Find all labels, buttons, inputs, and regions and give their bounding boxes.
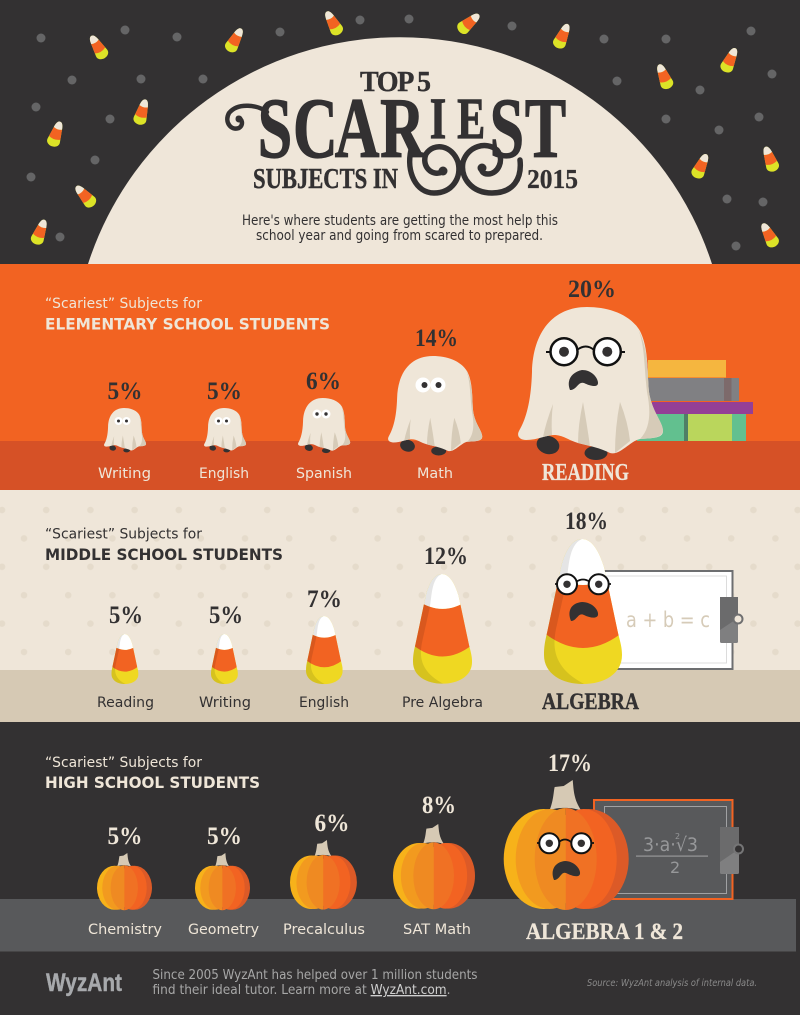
item: english: 7% xyxy=(307,586,342,613)
item: sat math: SAT Math xyxy=(403,922,471,938)
item: writing: Writing xyxy=(98,466,151,482)
item: algebra: 18% xyxy=(565,508,608,535)
heading: elementary xyxy=(45,296,330,334)
item: algebra xyxy=(542,508,639,714)
scattered candy corn icons xyxy=(29,8,781,250)
item: sat math xyxy=(393,792,475,938)
item: reading xyxy=(97,602,154,711)
item: algebra: ALGEBRA xyxy=(542,689,639,714)
glasses xyxy=(546,338,625,365)
item: writing: 5% xyxy=(209,602,243,629)
heading: middle xyxy=(45,527,283,564)
floor xyxy=(0,670,800,722)
item: geometry: 5% xyxy=(207,823,242,850)
icon: books xyxy=(637,360,753,441)
logo: wyzant: WyzAnt xyxy=(46,969,123,997)
intro text: Here's where students are getting the most help this xyxy=(242,213,558,229)
heading: high xyxy=(45,755,260,792)
title line: subjects in: SUBJECTS IN xyxy=(253,164,398,195)
heading: elementary: “Scariest” Subjects for xyxy=(45,296,202,312)
item: precalculus: Precalculus xyxy=(283,922,365,938)
item: algebra 1 and 2 xyxy=(504,750,683,944)
icon: chalkboard: 3·a·√3 xyxy=(643,834,698,856)
glasses xyxy=(555,574,611,594)
item: chemistry xyxy=(88,823,162,938)
item: writing: 5% xyxy=(108,378,142,405)
item: geometry: Geometry xyxy=(188,922,259,938)
item: reading: READING xyxy=(542,460,629,486)
item: math: 14% xyxy=(415,325,458,352)
icon: chalkboard: 2 xyxy=(675,832,680,841)
item: english: 5% xyxy=(207,378,242,405)
item: english xyxy=(299,586,349,711)
floor xyxy=(0,441,800,490)
title line: scariest: SCAR xyxy=(258,81,426,177)
footer text: find their ideal tutor. Learn more at WyzAnt.com. xyxy=(152,982,450,998)
item: reading: Reading xyxy=(97,695,154,711)
item: pre algebra: Pre Algebra xyxy=(402,695,483,711)
icon: whiteboard: a + b = c xyxy=(626,608,710,632)
footer xyxy=(46,967,757,998)
scattered background dots xyxy=(26,14,776,250)
item: geometry xyxy=(188,823,259,938)
title line: scariest: ST xyxy=(490,81,566,177)
item: english: English xyxy=(199,466,249,482)
mouth xyxy=(569,602,598,621)
item: writing xyxy=(199,602,251,711)
item: writing: Writing xyxy=(199,695,251,711)
item: pre algebra xyxy=(402,543,483,711)
heading: middle: “Scariest” Subjects for xyxy=(45,527,202,543)
heading: middle: MIDDLE SCHOOL STUDENTS xyxy=(45,545,283,564)
panel: high school xyxy=(0,722,800,1015)
item: spanish: 6% xyxy=(306,368,341,395)
glasses xyxy=(537,833,594,853)
item: math: Math xyxy=(417,466,453,482)
item: math xyxy=(388,325,482,482)
heading: high: “Scariest” Subjects for xyxy=(45,755,202,771)
icon: chalkboard: 2 xyxy=(670,858,680,877)
mouth xyxy=(569,370,598,390)
item: english: English xyxy=(299,695,349,711)
item: chemistry: 5% xyxy=(108,823,142,850)
heading: elementary: ELEMENTARY SCHOOL STUDENTS xyxy=(45,314,330,334)
item: writing xyxy=(98,378,151,482)
item: chemistry: Chemistry xyxy=(88,922,162,938)
floor xyxy=(0,899,796,952)
title line: top 5: TOP 5 xyxy=(360,67,433,98)
footer text xyxy=(152,967,478,998)
item: reading xyxy=(518,276,663,486)
footer text: Since 2005 WyzAnt has helped over 1 million students xyxy=(152,967,478,983)
item: precalculus: 6% xyxy=(314,810,350,837)
item: pre algebra: 12% xyxy=(424,543,468,570)
item: english xyxy=(199,378,249,482)
title line: scariest: IE xyxy=(430,86,485,151)
item: reading: 5% xyxy=(109,602,143,629)
background: top dark area xyxy=(0,0,800,264)
item: reading: 20% xyxy=(568,276,616,303)
title line: year: 2015 xyxy=(527,164,578,194)
item: sat math: 8% xyxy=(422,792,456,819)
heading: high: HIGH SCHOOL STUDENTS xyxy=(45,773,260,792)
icon: chalkboard xyxy=(594,800,743,899)
icon: whiteboard xyxy=(601,571,742,669)
title xyxy=(227,67,578,195)
item: algebra 1 and 2: 17% xyxy=(548,750,592,777)
item: precalculus xyxy=(283,810,365,938)
mouth xyxy=(553,861,580,880)
item: algebra 1 and 2: ALGEBRA 1 & 2 xyxy=(526,919,683,944)
title swirls xyxy=(227,106,520,193)
source note: Source: WyzAnt analysis of internal data. xyxy=(587,978,757,989)
item: spanish xyxy=(296,368,352,482)
moon xyxy=(88,37,712,264)
intro text xyxy=(242,213,558,244)
panel: middle school xyxy=(0,490,800,722)
item: spanish: Spanish xyxy=(296,466,352,482)
panel: elementary school xyxy=(0,264,800,490)
intro text: school year and going from scared to prepared. xyxy=(256,228,543,244)
